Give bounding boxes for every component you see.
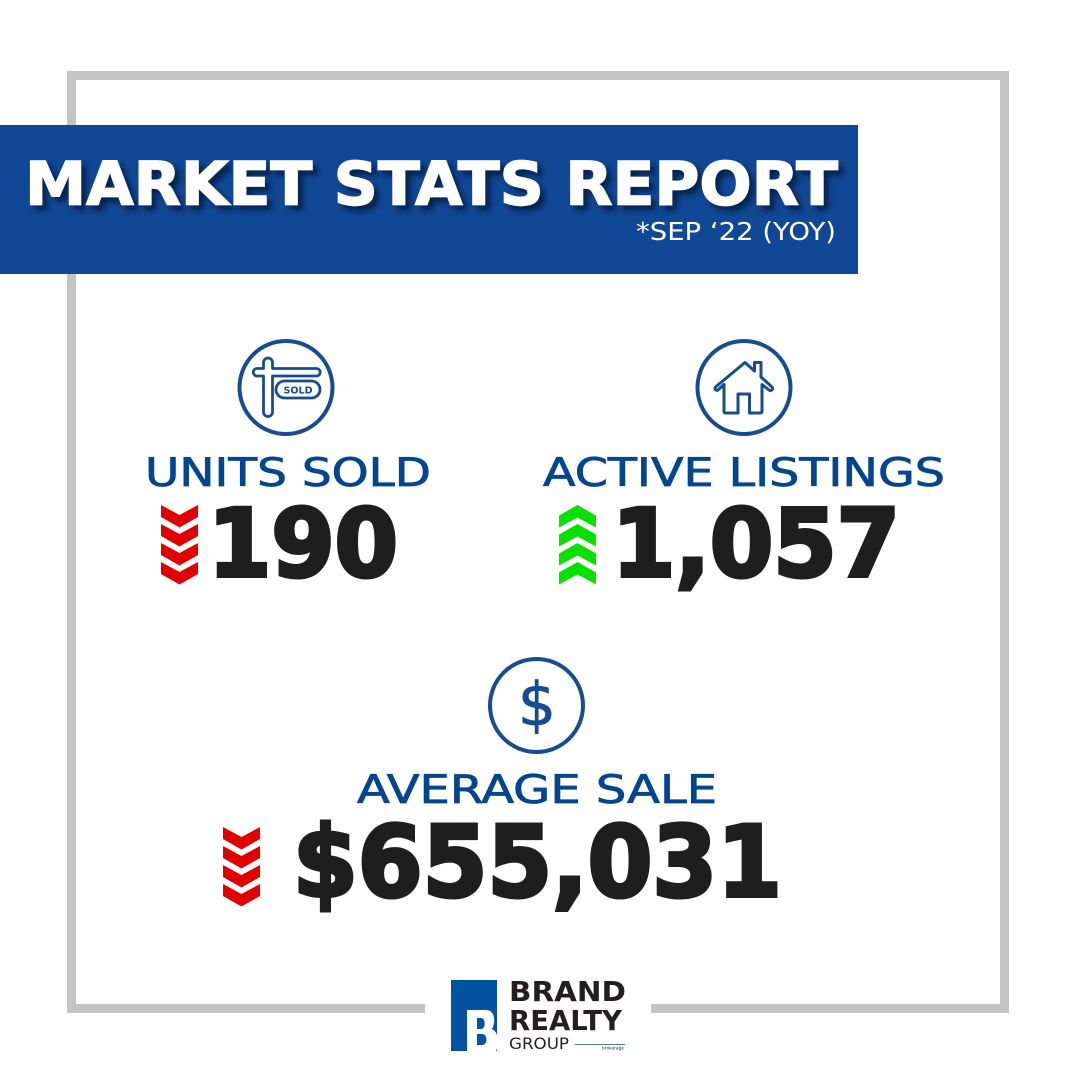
- logo text: [509, 975, 626, 1053]
- icon: sold sign: SOLD: [284, 386, 312, 396]
- value: $655,031: $655,031: [293, 806, 782, 920]
- value: 1,057: 1,057: [612, 490, 900, 599]
- icon: red chevrons down: [161, 505, 198, 584]
- logo: [451, 975, 626, 1053]
- heading: active listings: ACTIVE LISTINGS: [543, 451, 945, 496]
- panel: average sale: [223, 659, 782, 920]
- icon: red chevrons down: [223, 827, 260, 906]
- logo text: brokerage: [602, 1046, 625, 1050]
- panel: units sold: [145, 341, 431, 599]
- icon: house: [698, 341, 790, 434]
- icon: dollar: $: [518, 670, 556, 740]
- heading: average sale: AVERAGE SALE: [357, 768, 717, 813]
- logo text: BRAND: [509, 975, 626, 1008]
- icon: dollar: [490, 659, 583, 752]
- icon: green chevrons up: [559, 505, 596, 584]
- icon: sold sign: [240, 341, 332, 434]
- subtitle: *SEP ‘22 (YOY): [636, 217, 836, 246]
- panel: active listings: [543, 341, 945, 599]
- logo mark: [451, 980, 498, 1051]
- logo text: REALTY: [509, 1004, 623, 1037]
- banner: [0, 125, 858, 274]
- title: MARKET STATS REPORT: [25, 150, 838, 220]
- heading: units sold: UNITS SOLD: [145, 451, 431, 496]
- value: 190: 190: [208, 490, 398, 599]
- gray frame: [72, 76, 1004, 1008]
- logo text: GROUP: [509, 1034, 569, 1053]
